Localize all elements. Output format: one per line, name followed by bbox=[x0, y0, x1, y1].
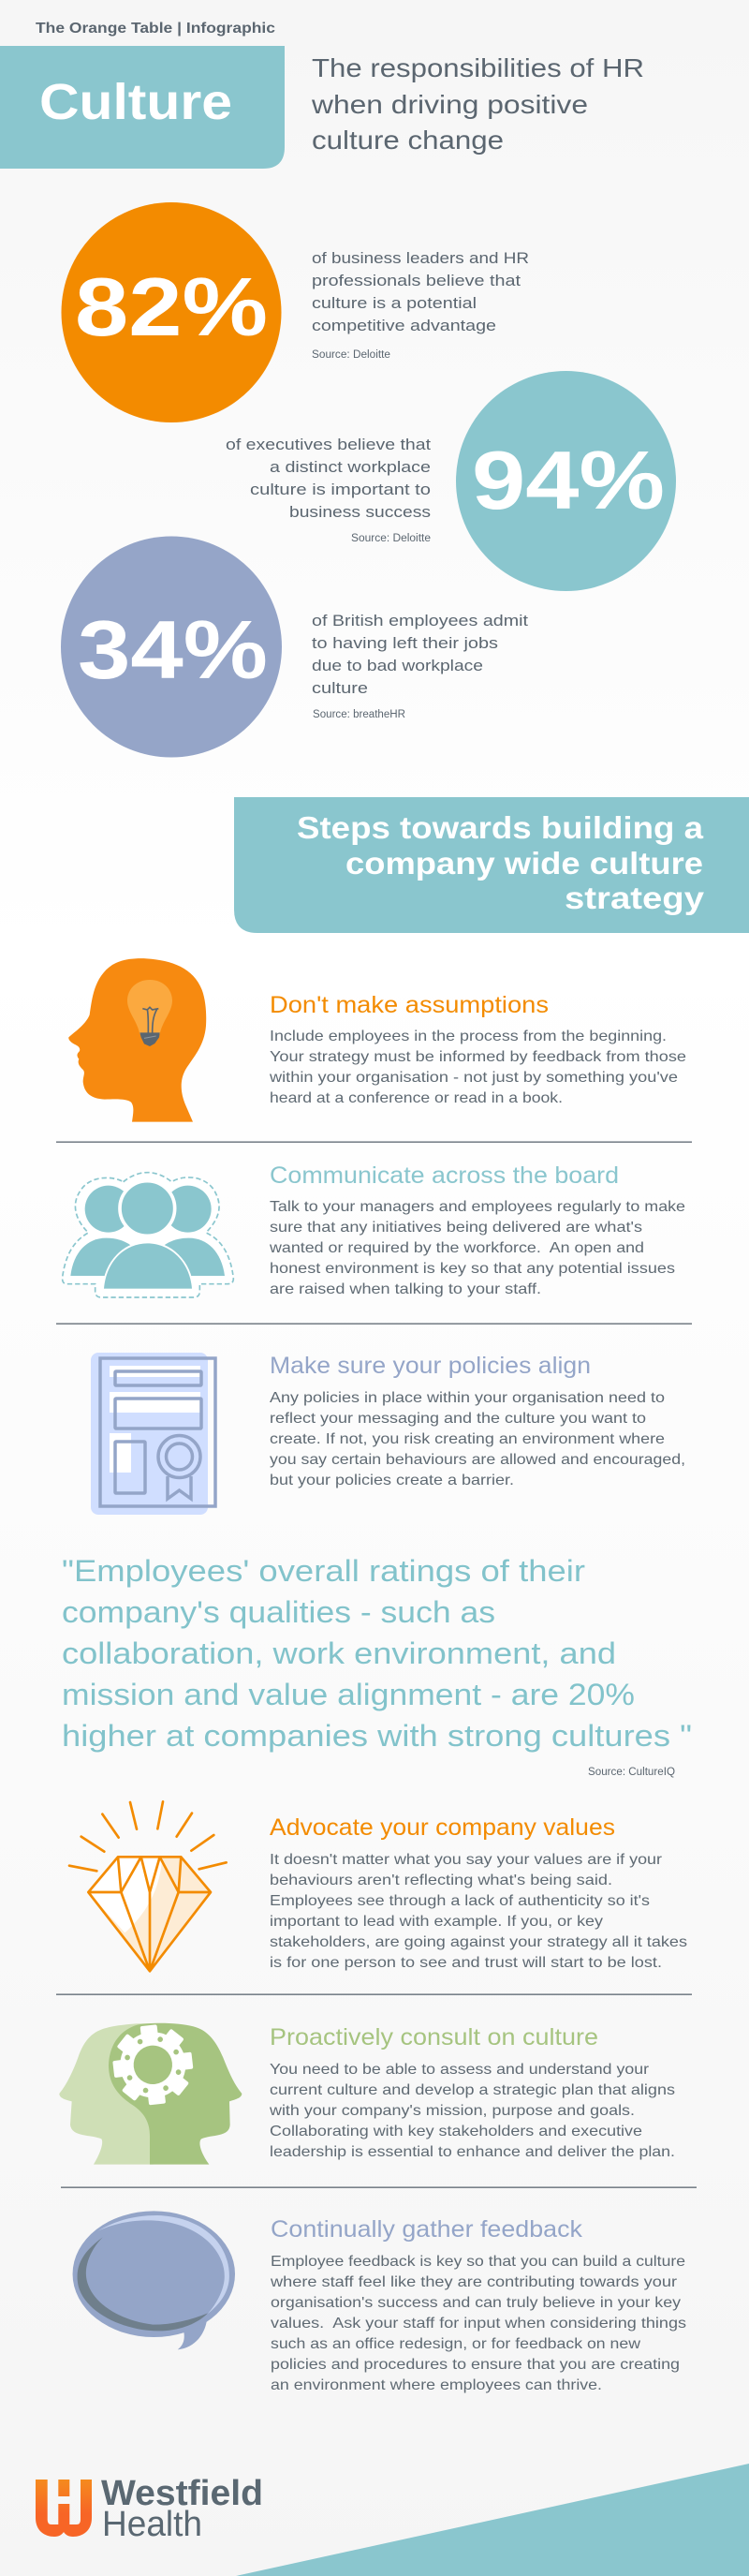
stat circle: 34% bbox=[61, 536, 282, 757]
step 3 text: policies: reflect your messaging and the culture you want to bbox=[270, 1411, 646, 1427]
step 4 text: values: behaviours aren't reflecting what's being said. bbox=[270, 1873, 612, 1888]
stat text: executives bbox=[226, 436, 431, 544]
step 6 text: feedback: Continually gather feedback bbox=[271, 2216, 583, 2243]
stat circle: 94% bbox=[456, 371, 676, 591]
pull quote: collaboration, work environment, and bbox=[62, 1636, 616, 1670]
step 2 text: communicate bbox=[269, 1162, 685, 1297]
title panel: Culture: Culture bbox=[39, 74, 232, 130]
stat text: business leaders bbox=[312, 249, 529, 361]
step 4 text: values: is for one person to see and trust will start to be lost. bbox=[270, 1955, 662, 1971]
stat text: business leaders: of business leaders and HR bbox=[312, 249, 529, 267]
section banner: steps bbox=[234, 797, 749, 933]
logo: Westfield Health: Westfield bbox=[101, 2474, 263, 2513]
quote source: Source: CultureIQ bbox=[588, 1767, 675, 1778]
stat text: British employees: culture bbox=[312, 679, 368, 697]
step 3 text: policies: create. If not, you risk creating an environment where bbox=[270, 1431, 665, 1447]
pull quote: company's qualities - such as bbox=[62, 1595, 495, 1629]
step 6 text: feedback bbox=[270, 2216, 686, 2393]
stat text: British employees: of British employees admit bbox=[312, 612, 528, 629]
icon: policy document bbox=[91, 1353, 215, 1515]
step 2 text: communicate: honest environment is key so that any potential issues bbox=[270, 1261, 675, 1277]
stat text: executives: culture is important to bbox=[250, 481, 431, 498]
step 6 text: feedback: an environment where employees can thrive. bbox=[271, 2377, 602, 2393]
subtitle bbox=[311, 53, 644, 155]
subtitle: when driving positive bbox=[311, 90, 588, 119]
stat text: executives: of executives believe that bbox=[226, 436, 431, 453]
step 4 text: values bbox=[270, 1814, 687, 1971]
step 3 text: policies: Any policies in place within your organisation need to bbox=[270, 1390, 665, 1406]
step 6 text: feedback: Employee feedback is key so that you can build a culture bbox=[271, 2254, 685, 2270]
step 4 text: values: stakeholders, are going against your strategy all it takes bbox=[270, 1934, 687, 1950]
subtitle: culture change bbox=[312, 126, 504, 155]
stat circle: 82%: 82% bbox=[75, 260, 268, 353]
step 1 text: assumptions bbox=[269, 992, 686, 1106]
stat text: business leaders: culture is a potential bbox=[312, 294, 477, 312]
subtitle: The responsibilities of HR bbox=[312, 53, 644, 82]
step 5 text: consult: with your company's mission, purpose and goals. bbox=[269, 2103, 635, 2119]
icon: head with light bulb bbox=[68, 958, 206, 1122]
stat text: British employees: due to bad workplace bbox=[312, 657, 483, 674]
stat text: British employees: Source: breatheHR bbox=[313, 709, 405, 720]
section banner: steps: strategy bbox=[565, 881, 705, 915]
step 4 text: values: It doesn't matter what you say your values are if your bbox=[270, 1852, 663, 1868]
step 6 text: feedback: organisation's success and can truly believe in your key bbox=[271, 2295, 681, 2311]
logo: Westfield Health bbox=[36, 2474, 263, 2544]
header label: The Orange Table | Infographic bbox=[36, 21, 275, 37]
step 2 text: communicate: sure that any initiatives being delivered are what's bbox=[270, 1220, 642, 1236]
stat text: executives: a distinct workplace bbox=[270, 458, 431, 476]
step 2 text: communicate: Communicate across the board bbox=[270, 1162, 619, 1189]
stat text: executives: business success bbox=[289, 503, 431, 521]
step 6 text: feedback: values. Ask your staff for input when considering things bbox=[271, 2316, 686, 2332]
step 2 text: communicate: are raised when talking to your staff. bbox=[270, 1281, 541, 1297]
stat text: executives: Source: Deloitte bbox=[351, 533, 431, 544]
step 6 text: feedback: policies and procedures to ensure that you are creating bbox=[271, 2357, 680, 2373]
pull quote: "Employees' overall ratings of their bbox=[62, 1554, 585, 1588]
section banner: steps: Steps towards building a bbox=[297, 810, 704, 845]
step 1 text: assumptions: Don't make assumptions bbox=[270, 992, 549, 1018]
step 1 text: assumptions: Include employees in the process from the beginning. bbox=[270, 1029, 667, 1044]
section banner: steps: company wide culture bbox=[345, 846, 703, 881]
stat text: British employees: to having left their jobs bbox=[312, 634, 498, 652]
step 5 text: consult: Proactively consult on culture bbox=[270, 2024, 598, 2050]
stat circle: 34%: 34% bbox=[78, 603, 268, 696]
icon: team of people bbox=[63, 1173, 233, 1297]
corner triangle bbox=[236, 2464, 749, 2576]
step 5 text: consult bbox=[269, 2024, 675, 2160]
step 4 text: values: Employees see through a lack of authenticity so it's bbox=[270, 1893, 650, 1909]
pull quote: mission and value alignment - are 20% bbox=[62, 1678, 635, 1711]
stat text: business leaders: Source: Deloitte bbox=[312, 349, 390, 361]
stat circle: 94%: 94% bbox=[472, 434, 665, 526]
step 3 text: policies: but your policies create a barrier. bbox=[270, 1473, 514, 1488]
stat text: British employees bbox=[312, 612, 528, 720]
step 4 text: values: Advocate your company values bbox=[270, 1814, 615, 1841]
step 1 text: assumptions: Your strategy must be informed by feedback from those bbox=[270, 1049, 686, 1065]
step 5 text: consult: current culture and develop a strategic plan that aligns bbox=[270, 2082, 675, 2098]
icon: diamond bbox=[69, 1801, 227, 1971]
step 1 text: assumptions: heard at a conference or read in a book. bbox=[270, 1090, 563, 1106]
step 3 text: policies bbox=[270, 1353, 685, 1488]
step 1 text: assumptions: within your organisation - not just by something you've bbox=[269, 1070, 678, 1086]
step 2 text: communicate: Talk to your managers and employees regularly to make bbox=[270, 1199, 685, 1215]
stat text: business leaders: professionals believe that bbox=[312, 272, 521, 289]
stat circle: 82% bbox=[62, 202, 281, 422]
step 4 text: values: important to lead with example. If you, or key bbox=[270, 1914, 603, 1930]
pull quote bbox=[62, 1554, 692, 1753]
step 5 text: consult: Collaborating with key stakeholders and executive bbox=[270, 2124, 642, 2139]
icon: two heads with gear bbox=[59, 2021, 242, 2165]
step 6 text: feedback: such as an office redesign, or for feedback on new bbox=[271, 2336, 640, 2352]
logo: Westfield Health: Health bbox=[102, 2505, 202, 2544]
pull quote: higher at companies with strong cultures " bbox=[62, 1719, 692, 1753]
stat text: business leaders: competitive advantage bbox=[312, 317, 496, 334]
step 2 text: communicate: wanted or required by the workforce. An open and bbox=[269, 1240, 644, 1256]
title panel: Culture bbox=[0, 46, 285, 169]
step 5 text: consult: leadership is essential to enhance and deliver the plan. bbox=[270, 2144, 675, 2160]
step 5 text: consult: You need to be able to assess and understand your bbox=[270, 2062, 650, 2078]
step 6 text: feedback: where staff feel like they are contributing towards your bbox=[270, 2274, 678, 2290]
step 3 text: policies: Make sure your policies align bbox=[270, 1353, 591, 1379]
step 3 text: policies: you say certain behaviours are allowed and encouraged, bbox=[270, 1452, 685, 1468]
icon: speech bubble bbox=[73, 2211, 235, 2349]
